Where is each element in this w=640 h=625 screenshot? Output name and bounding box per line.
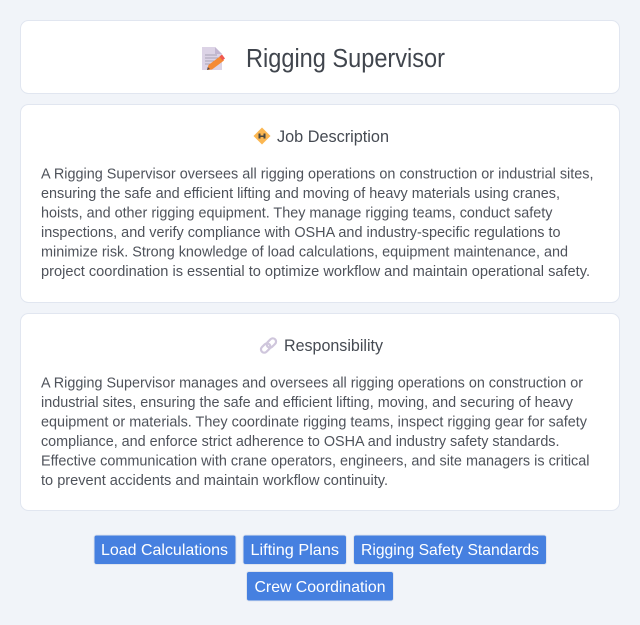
tag: Rigging Safety Standards: Rigging Safety Standards xyxy=(361,542,539,559)
text block: job description: minimize risk. Strong knowledge of load calculations, equipment maintenance, and xyxy=(41,244,568,260)
panel: job description xyxy=(20,104,620,302)
text block: job description: hoists, and other rigging equipment. They manage rigging teams, conduct safety xyxy=(41,206,553,222)
text block: job description: ensuring the safe and efficient lifting and moving of heavy materials using cranes, xyxy=(41,186,560,202)
tag: Lifting Plans: Lifting Plans xyxy=(250,542,339,559)
panel: title xyxy=(20,20,620,94)
text block: responsibility: industrial sites, ensuring the safe and efficient lifting, moving, and securing of heavy xyxy=(41,395,574,411)
text block: responsibility: to prevent accidents and maintain workflow continuity. xyxy=(41,473,388,489)
icon: chain link xyxy=(260,337,277,354)
heading: Rigging Supervisor: Rigging Supervisor xyxy=(246,45,445,73)
text block: responsibility xyxy=(41,376,590,489)
tag: Crew Coordination xyxy=(246,572,394,601)
panel: responsibility xyxy=(20,314,620,510)
text block: responsibility: A Rigging Supervisor manages and oversees all rigging operations on construction or xyxy=(41,376,583,392)
heading: Responsibility: Responsibility xyxy=(284,337,384,355)
text block: responsibility: equipment or materials. They coordinate rigging teams, inspect rigging gear for safety xyxy=(41,414,588,430)
text block: responsibility: compliance, and enforce strict adherence to OSHA and industry safety standards. xyxy=(41,434,560,450)
text block: job description: A Rigging Supervisor oversees all rigging operations on construction or industrial sites, xyxy=(41,166,594,182)
icon: construction diamond xyxy=(254,128,270,144)
tag: Crew Coordination: Crew Coordination xyxy=(254,579,386,596)
tag: Lifting Plans xyxy=(243,535,346,564)
text block: job description xyxy=(41,166,594,280)
icon: document with pencil xyxy=(202,47,225,70)
text block: job description: project coordination is essential to optimize workflow and maintain operational safety. xyxy=(41,264,590,280)
tag: Rigging Safety Standards xyxy=(354,535,546,564)
text block: job description: inspections, and verify compliance with OSHA and industry-specific regulations to xyxy=(41,225,560,241)
heading: Job Description: Job Description xyxy=(277,128,389,146)
tag: Load Calculations xyxy=(94,535,236,564)
text block: responsibility: Effective communication with crane operators, engineers, and site managers is critical xyxy=(41,454,590,470)
tag: Load Calculations: Load Calculations xyxy=(101,542,228,559)
